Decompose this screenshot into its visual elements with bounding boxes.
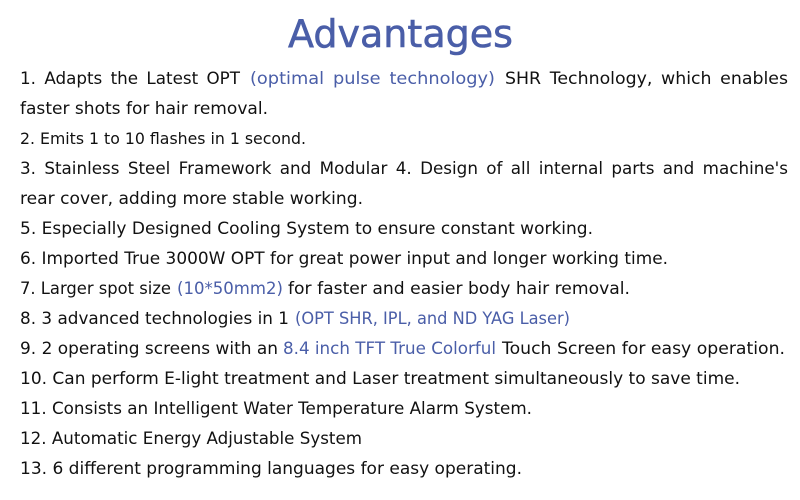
item 7: (10*50mm2): [177, 279, 283, 298]
title: Advantages: [288, 12, 513, 57]
item 9: [20, 339, 785, 358]
item 12: 12. Automatic Energy Adjustable System: [20, 429, 362, 448]
item 9: 9. 2 operating screens with an: [20, 339, 278, 358]
item 3 and 4: rear cover, adding more stable working.: [20, 189, 363, 208]
item 5: 5. Especially Designed Cooling System to ensure constant working.: [20, 219, 593, 238]
item 1: [20, 69, 788, 118]
item 6: 6. Imported True 3000W OPT for great power input and longer working time.: [20, 249, 668, 268]
item 8: [20, 309, 570, 328]
item 10: 10. Can perform E-light treatment and Laser treatment simultaneously to save time.: [20, 369, 740, 388]
item 3 and 4: [20, 159, 788, 208]
item 3 and 4: 3. Stainless Steel Framework and Modular 4. Design of all internal parts and machine's: [20, 159, 788, 178]
item 1: 1. Adapts the Latest OPT: [20, 69, 241, 88]
item 1: faster shots for hair removal.: [20, 99, 268, 118]
item 13: 13. 6 different programming languages for easy operating.: [20, 459, 522, 478]
item 7: for faster and easier body hair removal.: [288, 279, 630, 298]
item 8: (OPT SHR, IPL, and ND YAG Laser): [295, 309, 570, 328]
item 7: 7. Larger spot size: [20, 279, 171, 298]
text block: advantages list: [20, 69, 788, 478]
item 1: (optimal pulse technology): [250, 69, 495, 88]
item 2: 2. Emits 1 to 10 flashes in 1 second.: [20, 129, 306, 148]
item 9: 8.4 inch TFT True Colorful: [283, 339, 496, 358]
item 9: Touch Screen for easy operation.: [501, 339, 785, 358]
item 11: 11. Consists an Intelligent Water Temperature Alarm System.: [20, 399, 532, 418]
item 1: SHR Technology, which enables: [505, 69, 788, 88]
item 8: 8. 3 advanced technologies in 1: [20, 309, 289, 328]
item 7: [20, 279, 630, 298]
